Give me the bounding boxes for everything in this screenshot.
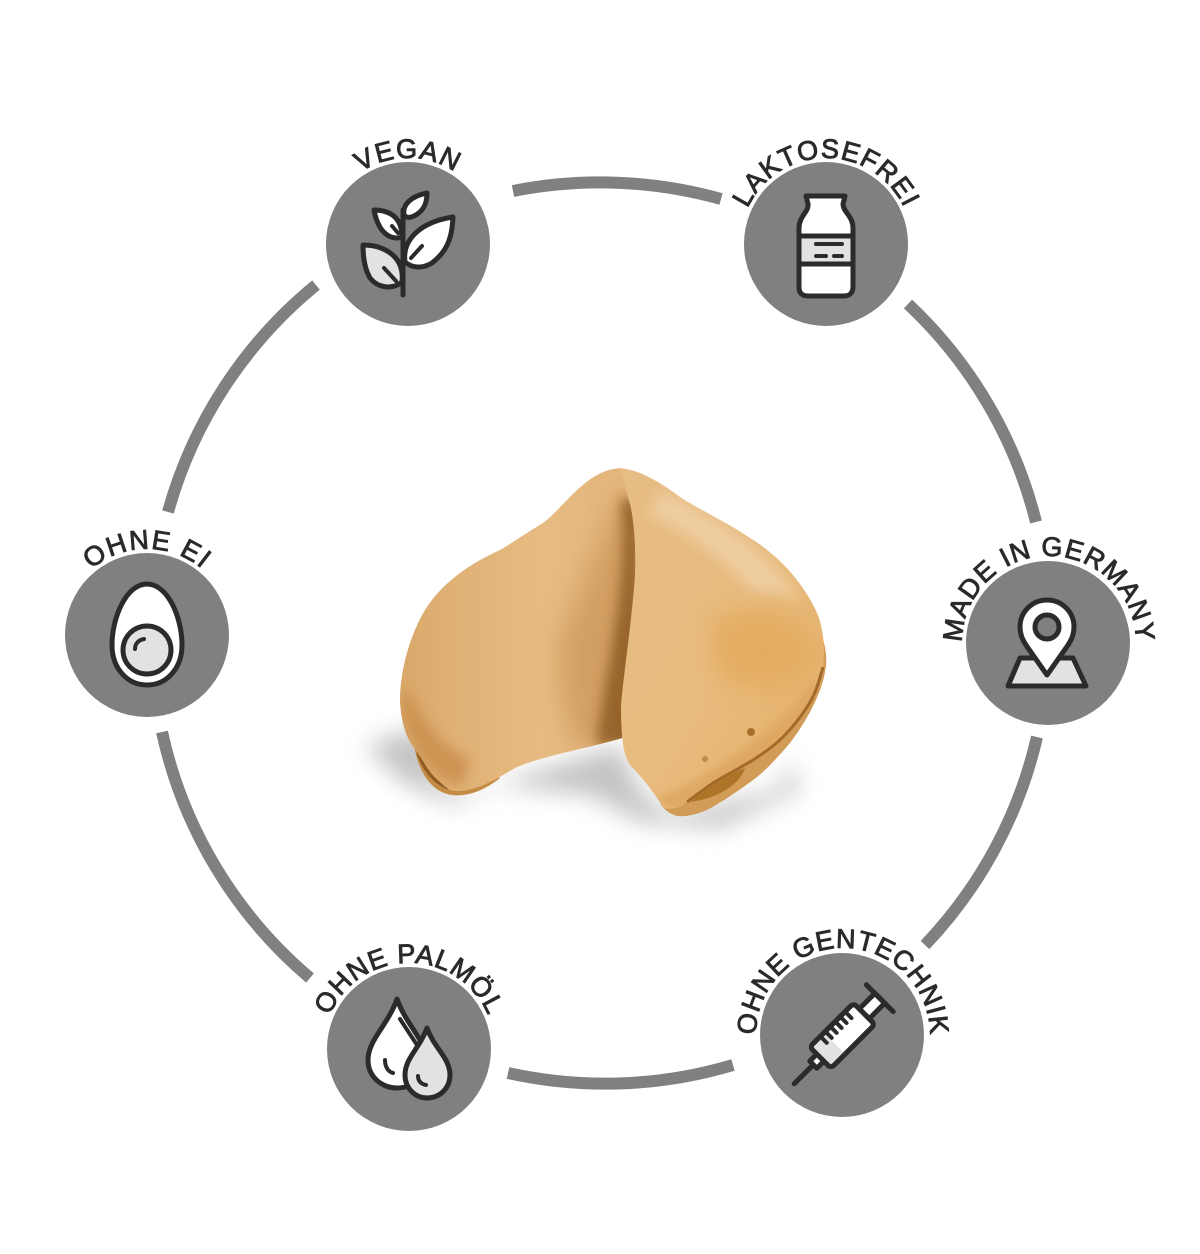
icon: egg	[112, 584, 182, 685]
badge: vegan	[326, 138, 490, 326]
cavity	[688, 768, 745, 802]
badge: laktosefrei	[732, 138, 920, 326]
back shell left	[414, 745, 500, 795]
back shell right	[660, 620, 826, 816]
label: OHNE EI	[84, 530, 212, 568]
badge circle	[760, 953, 924, 1117]
icon: map pin	[1008, 600, 1086, 686]
seam right	[687, 667, 823, 802]
badge circle	[326, 162, 490, 326]
badge: made in germany	[942, 536, 1156, 725]
right lobe	[620, 468, 824, 809]
badge circle	[327, 967, 491, 1131]
ring connectors	[162, 182, 1037, 1084]
badge: ohne gentechnik	[737, 928, 950, 1117]
badge circle	[744, 162, 908, 326]
label: OHNE PALMÖL	[316, 944, 501, 1015]
icon: bottle	[799, 196, 853, 296]
badge: ohne ei	[65, 530, 229, 717]
badge circle	[966, 561, 1130, 725]
label: LAKTOSEFREI	[732, 138, 920, 207]
left lobe	[400, 468, 636, 791]
badge: ohne palmoel	[316, 944, 501, 1131]
badge circle	[65, 553, 229, 717]
icon: syringe	[781, 985, 893, 1097]
label: OHNE GENTECHNIK	[737, 928, 950, 1036]
label: VEGAN	[351, 138, 462, 171]
fortune cookie	[365, 460, 835, 828]
icon: oil drops	[368, 999, 450, 1098]
pores	[747, 728, 755, 736]
icon: plant	[363, 193, 453, 295]
label: MADE IN GERMANY	[942, 536, 1156, 641]
cookie shadow	[365, 725, 800, 828]
